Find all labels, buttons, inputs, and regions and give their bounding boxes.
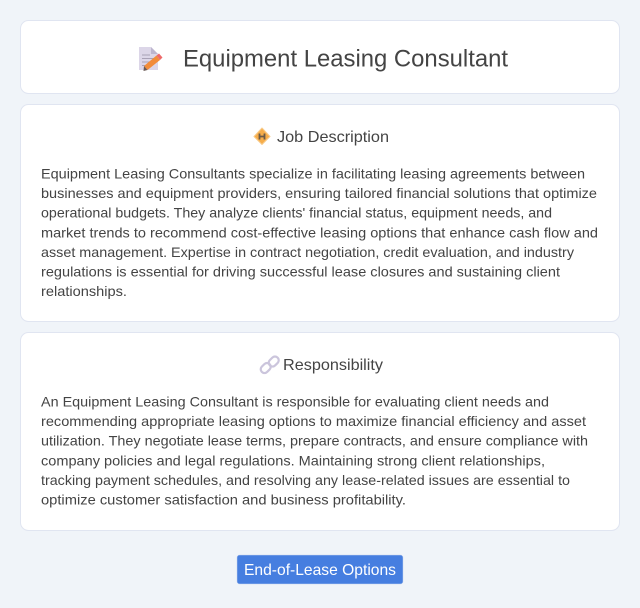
button: end-of-lease options: End-of-Lease Options <box>244 562 396 579</box>
text block: responsibility body <box>41 394 588 508</box>
text block: job description body: operational budgets. They analyze clients' financial status, equipment needs, and <box>41 205 552 221</box>
icon: chain link <box>259 355 280 375</box>
panel: title <box>20 20 620 94</box>
panel: job description <box>20 104 620 322</box>
text block: responsibility body: An Equipment Leasing Consultant is responsible for evaluating client needs and <box>41 394 549 410</box>
heading: title text: Equipment Leasing Consultant <box>183 46 508 72</box>
heading: responsibility: Responsibility <box>283 357 383 374</box>
text block: responsibility body: tracking payment schedules, and resolving any lease-related issues are essential to <box>41 472 570 488</box>
text block: responsibility body: utilization. They negotiate lease terms, prepare contracts, and ensure compliance with <box>41 433 588 449</box>
text block: job description body: market trends to recommend cost-effective leasing options that enhance cash flow and <box>41 224 598 240</box>
text block: job description body: Equipment Leasing Consultants specialize in facilitating leasing agreements between <box>41 166 585 182</box>
text block: responsibility body: company policies and legal regulations. Maintaining strong client relationships, <box>41 452 545 468</box>
text block: job description body <box>41 166 598 299</box>
icon: document with pencil <box>139 47 162 71</box>
text block: job description body: regulations is essential for driving successful lease closures and sustaining client <box>41 264 560 280</box>
text block: responsibility body: optimize customer satisfaction and business profitability. <box>41 492 406 508</box>
heading: job description: Job Description <box>277 129 389 146</box>
text block: responsibility body: recommending appropriate leasing options to maximize financial efficiency and asset <box>41 413 586 429</box>
icon: diamond sign <box>254 128 270 144</box>
button: end-of-lease options <box>237 555 403 584</box>
text block: job description body: businesses and equipment providers, ensuring tailored financial solutions that optimize <box>41 185 597 201</box>
panel: responsibility <box>20 332 620 530</box>
text block: job description body: relationships. <box>41 283 127 299</box>
text block: job description body: asset management. Expertise in contract negotiation, credit evaluation, and industry <box>41 244 574 260</box>
